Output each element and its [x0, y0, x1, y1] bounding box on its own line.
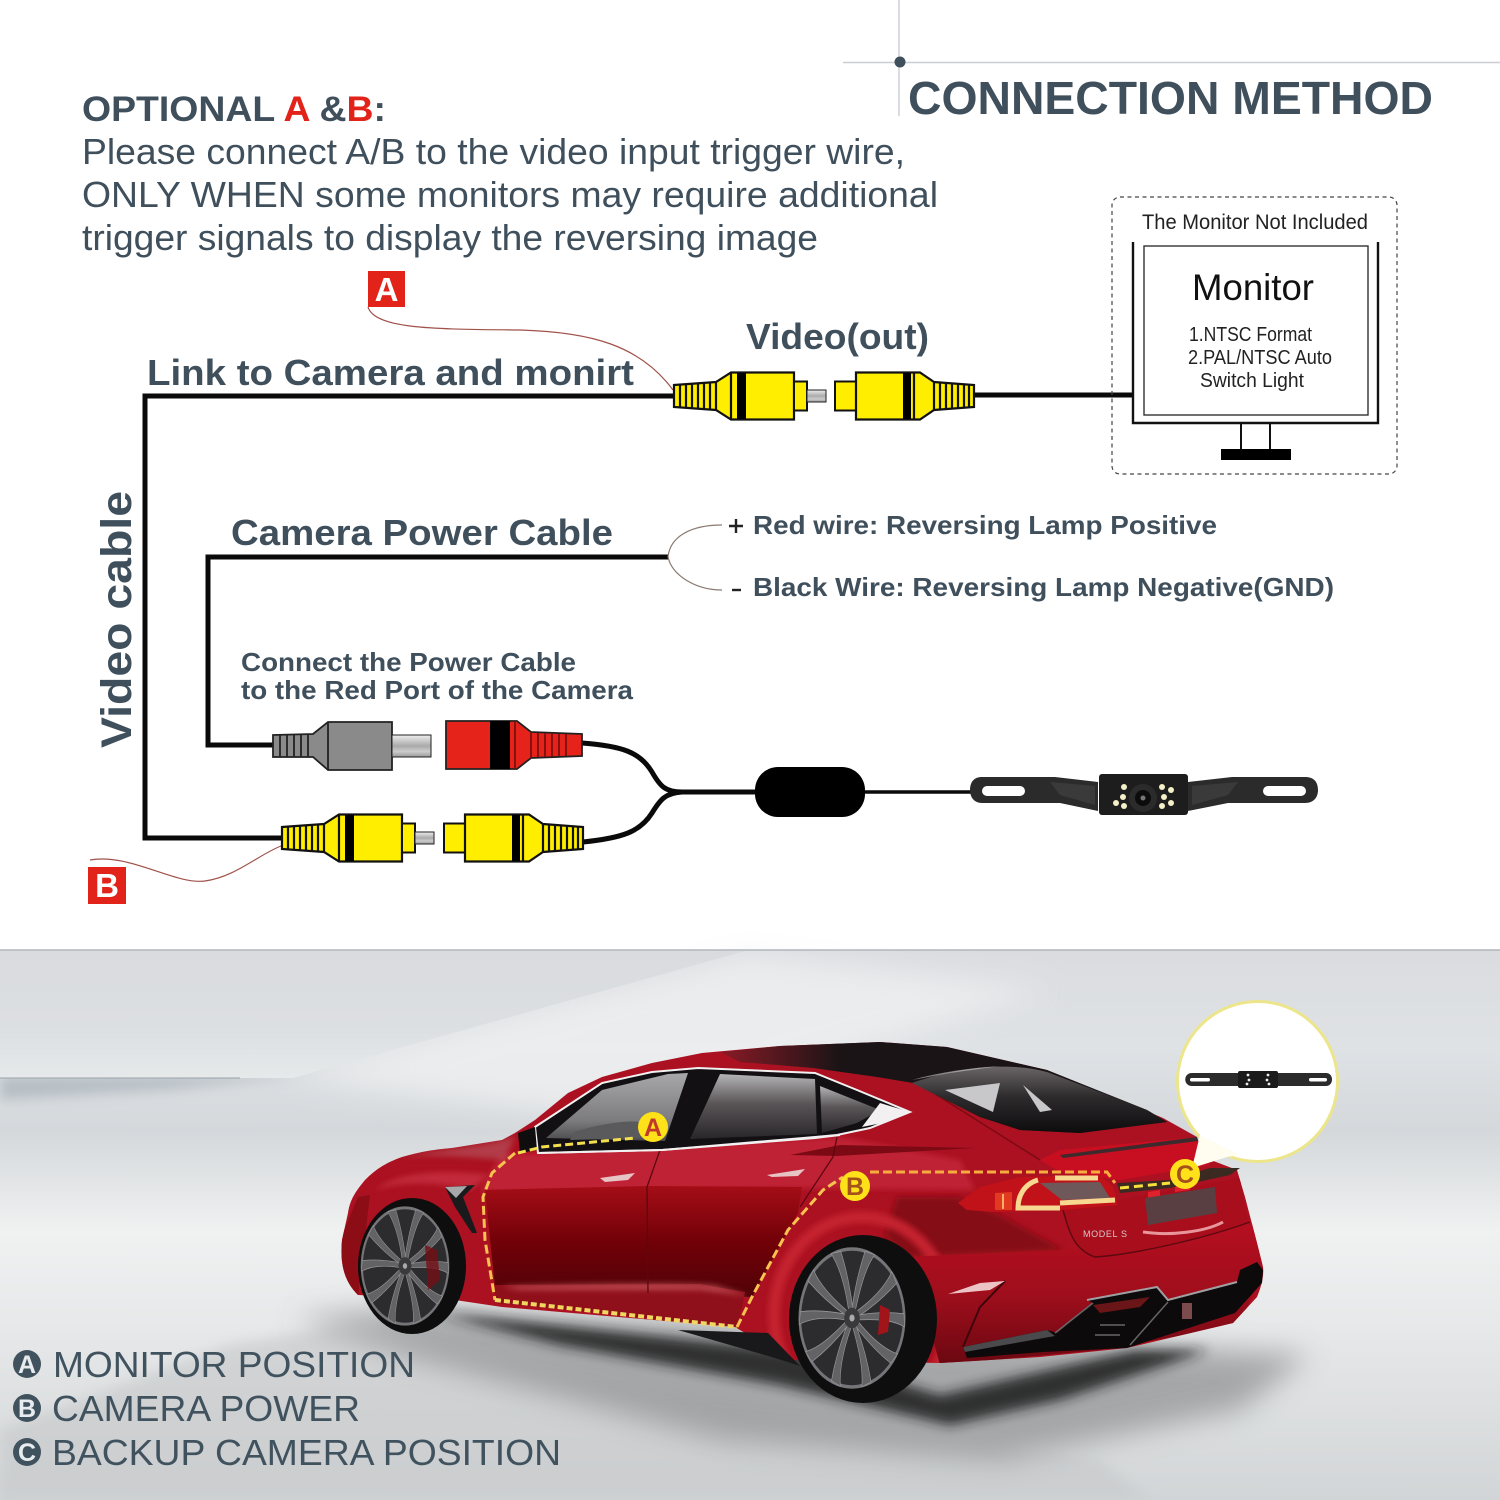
position legend: CAMERA POWER — [52, 1388, 360, 1429]
diagram labels: Camera Power Cable — [231, 512, 613, 553]
badge B — [840, 1171, 870, 1201]
position legend: B — [18, 1395, 36, 1423]
dashboard in front window — [570, 1122, 640, 1140]
label A square — [368, 271, 405, 308]
optional A and B instructions: ONLY WHEN some monitors may require additional — [82, 174, 938, 215]
diagram labels: to the Red Port of the Camera — [241, 675, 634, 705]
tail light — [958, 1175, 1118, 1212]
bumper side edge — [963, 1281, 1005, 1347]
wiring cables — [145, 395, 1134, 842]
spoiler — [1060, 1137, 1198, 1158]
position legend: A — [18, 1351, 36, 1379]
monitor panel: 2.PAL/NTSC Auto — [1188, 347, 1332, 369]
backup camera — [970, 774, 1318, 815]
optional A and B instructions — [82, 90, 938, 258]
rear deck — [1040, 1137, 1210, 1180]
rear window — [912, 1067, 1167, 1133]
bottom panel background — [0, 950, 1500, 1500]
label B square — [88, 867, 126, 904]
quarter panel dark — [885, 1197, 1063, 1257]
monitor panel: 1.NTSC Format — [1189, 324, 1312, 346]
rear bumper — [905, 1222, 1263, 1365]
monitor panel — [1112, 197, 1397, 474]
power wire notes: Black Wire: Reversing Lamp Negative(GND) — [753, 572, 1334, 602]
thin trigger wires — [90, 307, 673, 881]
gray power connector — [273, 722, 431, 770]
side skirt — [678, 1330, 800, 1366]
roof glass — [720, 1042, 1167, 1133]
front window — [546, 1073, 688, 1141]
mirror — [518, 1127, 537, 1153]
optional A and B instructions: OPTIONAL A &B: — [82, 90, 386, 129]
position legend: C — [18, 1439, 36, 1467]
diffuser details — [963, 1282, 1237, 1352]
trunk lid — [1182, 1178, 1242, 1238]
window surround and chrome — [535, 1068, 910, 1153]
front wheel — [358, 1198, 466, 1334]
diagram labels: Video(out) — [746, 316, 929, 357]
lower yellow video connectors — [282, 814, 583, 862]
trunk chrome line — [1143, 1222, 1223, 1234]
car ground shadow — [293, 1308, 1310, 1460]
monitor panel: Monitor — [1192, 267, 1314, 308]
position legend: BACKUP CAMERA POSITION — [52, 1432, 561, 1473]
car illustration — [293, 1002, 1338, 1460]
badge A — [638, 1112, 668, 1142]
front bumper shade — [340, 1195, 370, 1300]
black control box — [755, 767, 865, 817]
rear window reflections — [912, 1066, 1052, 1112]
monitor panel: The Monitor Not Included — [1142, 211, 1368, 234]
badge C: C — [1176, 1161, 1194, 1189]
position legend: MONITOR POSITION — [53, 1344, 415, 1385]
shoulder highlight — [480, 1137, 975, 1192]
rear chrome triangle — [862, 1103, 910, 1127]
callout with camera — [1178, 1002, 1338, 1168]
optional A and B instructions: Please connect A/B to the video input trigger wire, — [82, 131, 905, 172]
hood highlight — [400, 1136, 515, 1160]
badge B: B — [846, 1173, 864, 1201]
label A square: A — [375, 271, 398, 308]
diagram labels: Video cable — [93, 491, 141, 748]
rear wheel — [789, 1235, 937, 1403]
rear diffuser — [963, 1262, 1263, 1358]
optional A and B instructions: trigger signals to display the reversing image — [82, 217, 818, 258]
license plate recess — [1145, 1187, 1217, 1225]
rear arch glow — [767, 1210, 946, 1363]
red power connector — [446, 721, 582, 769]
diagram labels: Link to Camera and monirt — [147, 352, 634, 393]
lower door sheen — [495, 1284, 745, 1327]
monitor panel: Switch Light — [1200, 370, 1304, 392]
shoulder crease — [790, 1145, 975, 1156]
yellow dashed routes — [483, 1138, 1170, 1327]
car body — [341, 1042, 1264, 1363]
model badge: MODEL S — [1083, 1229, 1127, 1239]
rear quarter window — [820, 1086, 880, 1133]
badge C — [1170, 1159, 1200, 1189]
power wire notes: Red wire: Reversing Lamp Positive — [753, 510, 1217, 540]
diagram labels — [93, 316, 929, 748]
red lights under strip — [1148, 1185, 1190, 1198]
title: CONNECTION METHOD — [908, 72, 1433, 124]
door seams — [647, 1137, 837, 1293]
door panels — [485, 1186, 802, 1297]
header rule lines and dot — [843, 0, 1500, 116]
position legend — [13, 1344, 561, 1473]
label B square: B — [95, 867, 119, 904]
trunk strip — [1117, 1168, 1240, 1193]
rear door window — [690, 1074, 817, 1139]
upper yellow video connectors — [674, 372, 974, 420]
rear side reflector — [948, 1281, 1005, 1294]
badge A: A — [644, 1114, 662, 1142]
beltline chrome — [538, 1135, 840, 1153]
power wire split — [668, 525, 722, 590]
power wire notes — [729, 510, 1334, 602]
door handles — [600, 1173, 635, 1182]
diagram labels: Connect the Power Cable — [241, 647, 576, 677]
front fender vent — [445, 1185, 477, 1233]
